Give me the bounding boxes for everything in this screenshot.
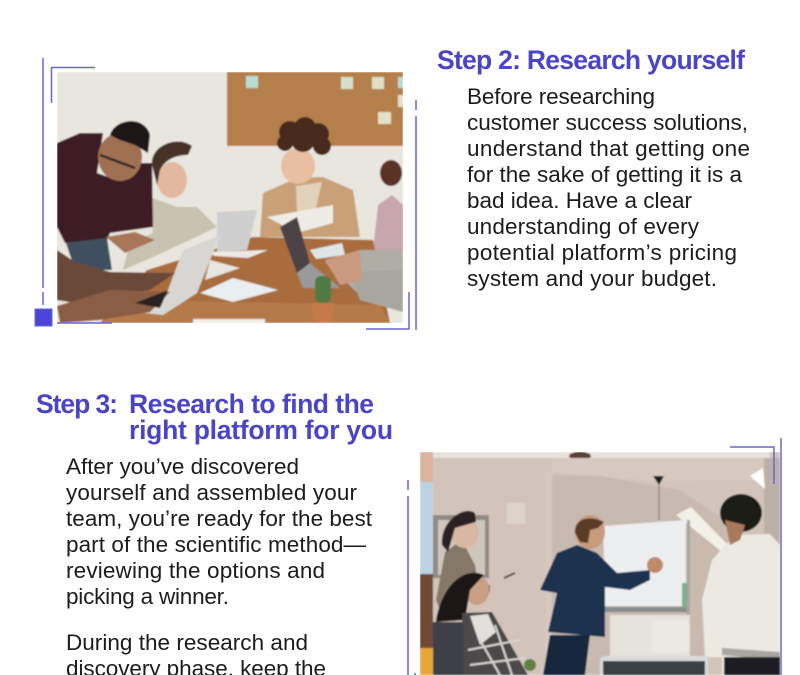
text block: step 2 body: customer success solutions, [467, 110, 748, 135]
photo: team meeting around a table [57, 72, 403, 323]
text block: step 2 body: system and your budget. [467, 266, 717, 291]
text block: step 2 body: potential platform’s pricing [467, 240, 737, 265]
text block: step 3 body: picking a winner. [66, 584, 229, 609]
text block: step 3 body: reviewing the options and [66, 558, 325, 583]
text block: step 3 body: yourself and assembled your [66, 480, 358, 505]
text block: step 2 body: understanding of every [467, 214, 700, 239]
text block: step 3 body: team, you’re ready for the best [66, 506, 373, 531]
text block: step 2 body: Before researching [467, 84, 655, 109]
heading: step 3: right platform for you [129, 415, 393, 445]
text block: step 2 body: bad idea. Have a clear [467, 188, 692, 213]
heading: step 3: Research to find the [129, 389, 374, 419]
photo: presenter at a whiteboard [420, 452, 780, 675]
icon: blue square accent [35, 309, 52, 326]
heading: step 3: Step 3: [36, 389, 118, 419]
text block: step 3 body: During the research and [66, 630, 308, 655]
heading: step 3 [36, 389, 393, 445]
text block: step 3 body: After you’ve discovered [66, 454, 299, 479]
text block: step 2 body: for the sake of getting it is a [467, 162, 742, 187]
decorative frame: photo 2 corners [408, 438, 781, 675]
text block: step 2 body [467, 84, 750, 291]
text block: step 2 body: understand that getting one [467, 136, 750, 161]
decorative frame: photo 1 corners [43, 58, 416, 330]
heading: step 2: Step 2: Research yourself [437, 45, 745, 75]
text block: step 3 body [66, 454, 373, 675]
text block: step 3 body: part of the scientific method— [66, 532, 366, 557]
